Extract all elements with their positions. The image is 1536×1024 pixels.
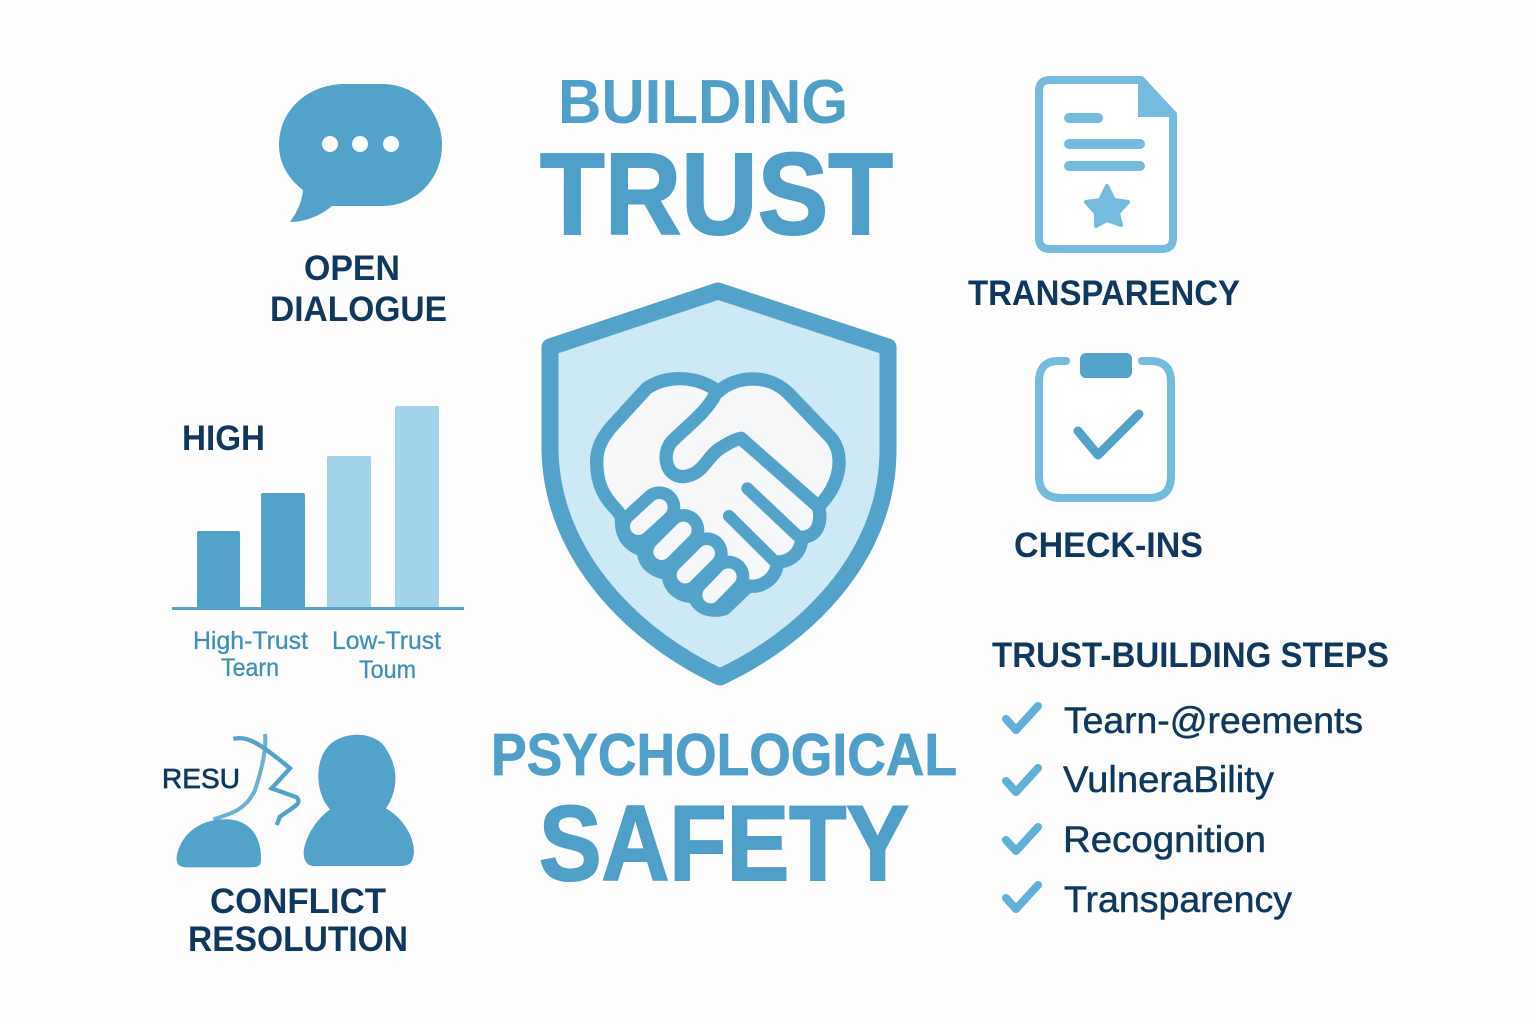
bar labels xyxy=(193,627,441,684)
label: check-ins: CHECK-INS xyxy=(1014,526,1203,565)
label: open dialogue xyxy=(270,249,447,329)
icon: conflict resolution figures: RESU xyxy=(162,763,240,794)
step: vulnerability: VulneraBility xyxy=(1063,759,1275,800)
icon: conflict resolution figures xyxy=(162,734,414,867)
title: building trust: TRUST xyxy=(540,129,893,259)
icon: clipboard check xyxy=(1039,353,1171,498)
icon: speech bubble xyxy=(279,84,442,222)
icon: shield with handshake xyxy=(550,291,888,677)
label: open dialogue: DIALOGUE xyxy=(270,290,447,329)
icon: document with star xyxy=(1039,78,1177,249)
step: team agreements: Tearn-@reements xyxy=(1064,700,1363,741)
title: psychological safety: SAFETY xyxy=(539,783,909,903)
label: conflict resolution xyxy=(188,882,408,959)
label: transparency: TRANSPARENCY xyxy=(968,274,1240,313)
panel: trust-building steps xyxy=(992,636,1389,920)
bar labels: Toum xyxy=(359,656,416,684)
bar chart: high trust vs low trust xyxy=(172,406,464,684)
step: recognition: Recognition xyxy=(1063,819,1266,860)
title: psychological safety xyxy=(491,722,957,903)
bar labels: Low-Trust xyxy=(332,627,441,655)
label: conflict resolution: CONFLICT xyxy=(210,882,386,921)
title: psychological safety: PSYCHOLOGICAL xyxy=(491,722,957,788)
bar labels: Tearn xyxy=(221,654,279,682)
bar labels: High-Trust xyxy=(193,627,308,655)
axis label: high: HIGH xyxy=(182,419,265,458)
bars xyxy=(172,406,464,610)
title: building trust xyxy=(540,68,893,259)
label: conflict resolution: RESOLUTION xyxy=(188,920,408,959)
title: building trust: BUILDING xyxy=(558,68,848,137)
step: transparency: Transparency xyxy=(1064,879,1292,920)
heading: trust-building steps: TRUST-BUILDING STEPS xyxy=(992,636,1389,675)
label: open dialogue: OPEN xyxy=(304,249,400,288)
